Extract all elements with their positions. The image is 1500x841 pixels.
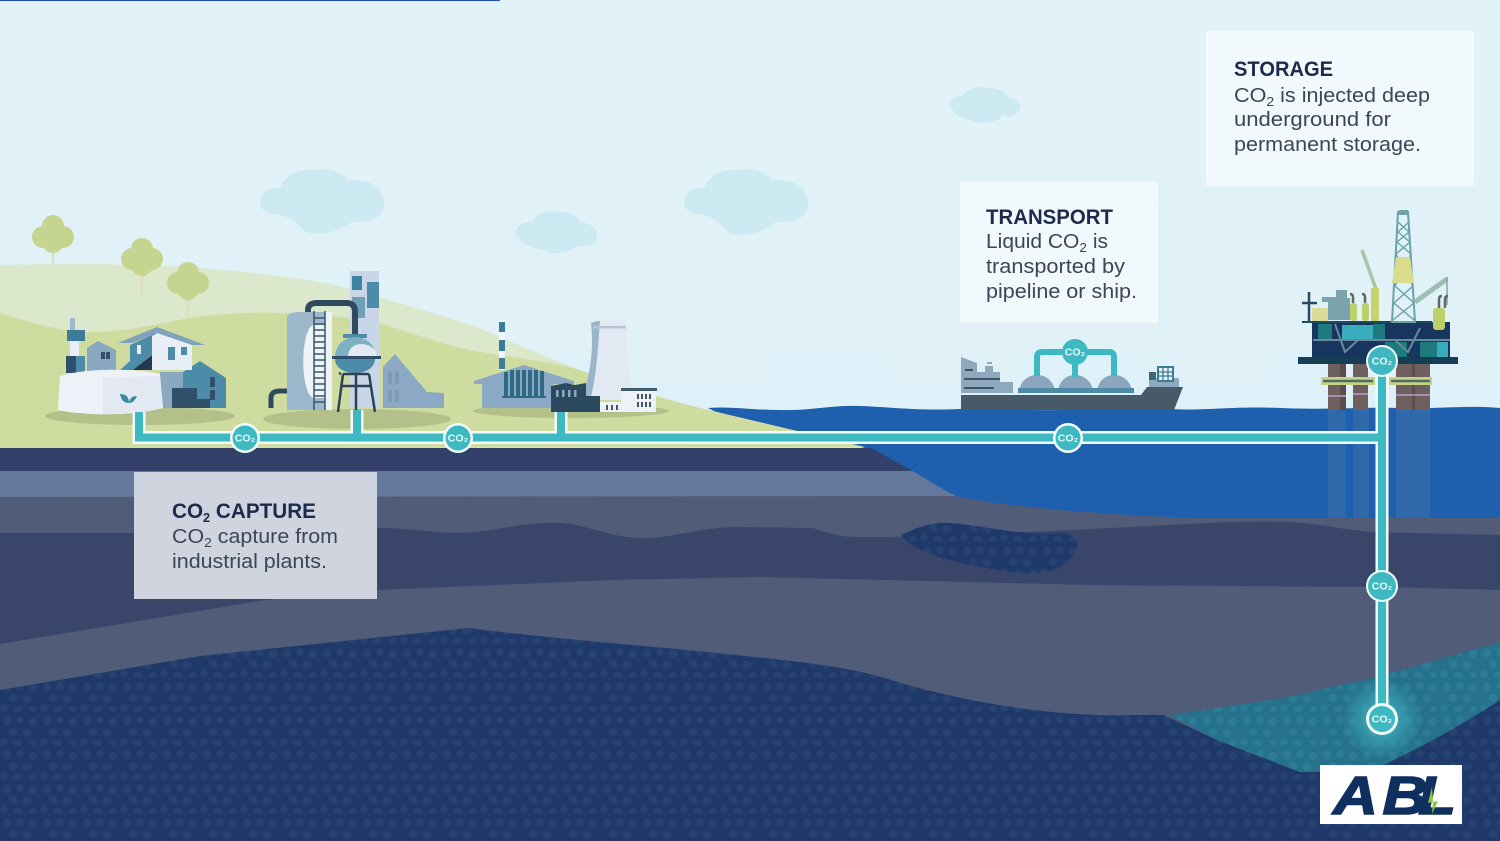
body text: [986, 231, 1137, 303]
oil platform: [1298, 210, 1458, 410]
body text: industrial plants.: [172, 551, 327, 573]
front hill: [0, 313, 865, 448]
pipeline node: CO₂: [448, 432, 469, 444]
heading: CAPTURE: [210, 500, 316, 523]
ABL logo: ABL: [1331, 766, 1456, 826]
body text: CO: [1234, 85, 1264, 107]
injection node: [1366, 703, 1398, 735]
layer: mid band: [0, 496, 1500, 790]
body text: 2: [204, 535, 212, 550]
heading: 2: [203, 510, 210, 525]
back hill: [0, 264, 865, 448]
pipeline node on ship: CO₂: [1065, 346, 1086, 358]
gas tank: [58, 370, 163, 414]
icon: leaf: [120, 394, 137, 403]
pipeline node: [443, 423, 473, 453]
pipeline node: CO₂: [1372, 580, 1393, 592]
top progress line: [0, 0, 500, 1]
body text: Liquid CO: [986, 231, 1075, 253]
heading: TRANSPORT: [986, 206, 1113, 229]
heading: STORAGE: [1234, 58, 1333, 81]
pipeline node: CO₂: [1058, 432, 1079, 444]
body text: [1234, 85, 1430, 156]
pipeline node: [1366, 345, 1398, 377]
geological layers: [0, 448, 1500, 841]
plant 3: power station and cooling tower: [473, 320, 669, 418]
panel: storage: [1206, 31, 1474, 186]
pipeline node: [230, 423, 260, 453]
body text: 2: [1266, 94, 1274, 109]
body text: [172, 526, 338, 573]
storage reservoir: [1170, 642, 1500, 772]
pipeline node: [1366, 570, 1398, 602]
trees: [32, 215, 209, 320]
plant 1: biogas facility: [45, 318, 235, 425]
pipeline node: CO₂: [235, 432, 256, 444]
body text: transported by: [986, 256, 1125, 278]
water tower: [332, 334, 381, 412]
icon: lightning bolt: [1428, 787, 1438, 814]
sea: [708, 406, 1500, 530]
body text: underground for: [1234, 109, 1391, 131]
injection node: CO₂: [1372, 714, 1393, 726]
clouds: [260, 87, 1020, 253]
CO2 pipeline: [139, 345, 1398, 735]
pipeline node: [1053, 423, 1083, 453]
layer: light band: [0, 471, 958, 497]
panel: transport: [960, 182, 1158, 323]
rock pocket: [901, 523, 1077, 573]
panel: CO2 capture: [134, 472, 377, 599]
pipeline node: CO₂: [1372, 356, 1393, 368]
layer: wavy dark band: [0, 522, 1500, 644]
body text: permanent storage.: [1234, 134, 1421, 156]
ladder: [314, 311, 325, 410]
plant 2: capture column, water tower and stack: [263, 271, 451, 429]
body text: is: [1087, 231, 1108, 253]
reservoir glow: [1342, 679, 1422, 759]
layer: dark topsoil: [0, 448, 915, 472]
heading: CO: [172, 500, 204, 523]
body text: pipeline or ship.: [986, 281, 1137, 303]
pipeline node on ship: [1062, 339, 1088, 365]
body text: is injected deep: [1274, 85, 1430, 107]
body text: capture from: [212, 526, 338, 548]
body text: CO: [172, 526, 202, 548]
body text: 2: [1079, 240, 1087, 255]
layer: deep rock: [0, 628, 1500, 841]
underwater rig leg shadows: [1328, 410, 1430, 518]
derrick: [1392, 210, 1415, 322]
ship: [961, 339, 1183, 410]
